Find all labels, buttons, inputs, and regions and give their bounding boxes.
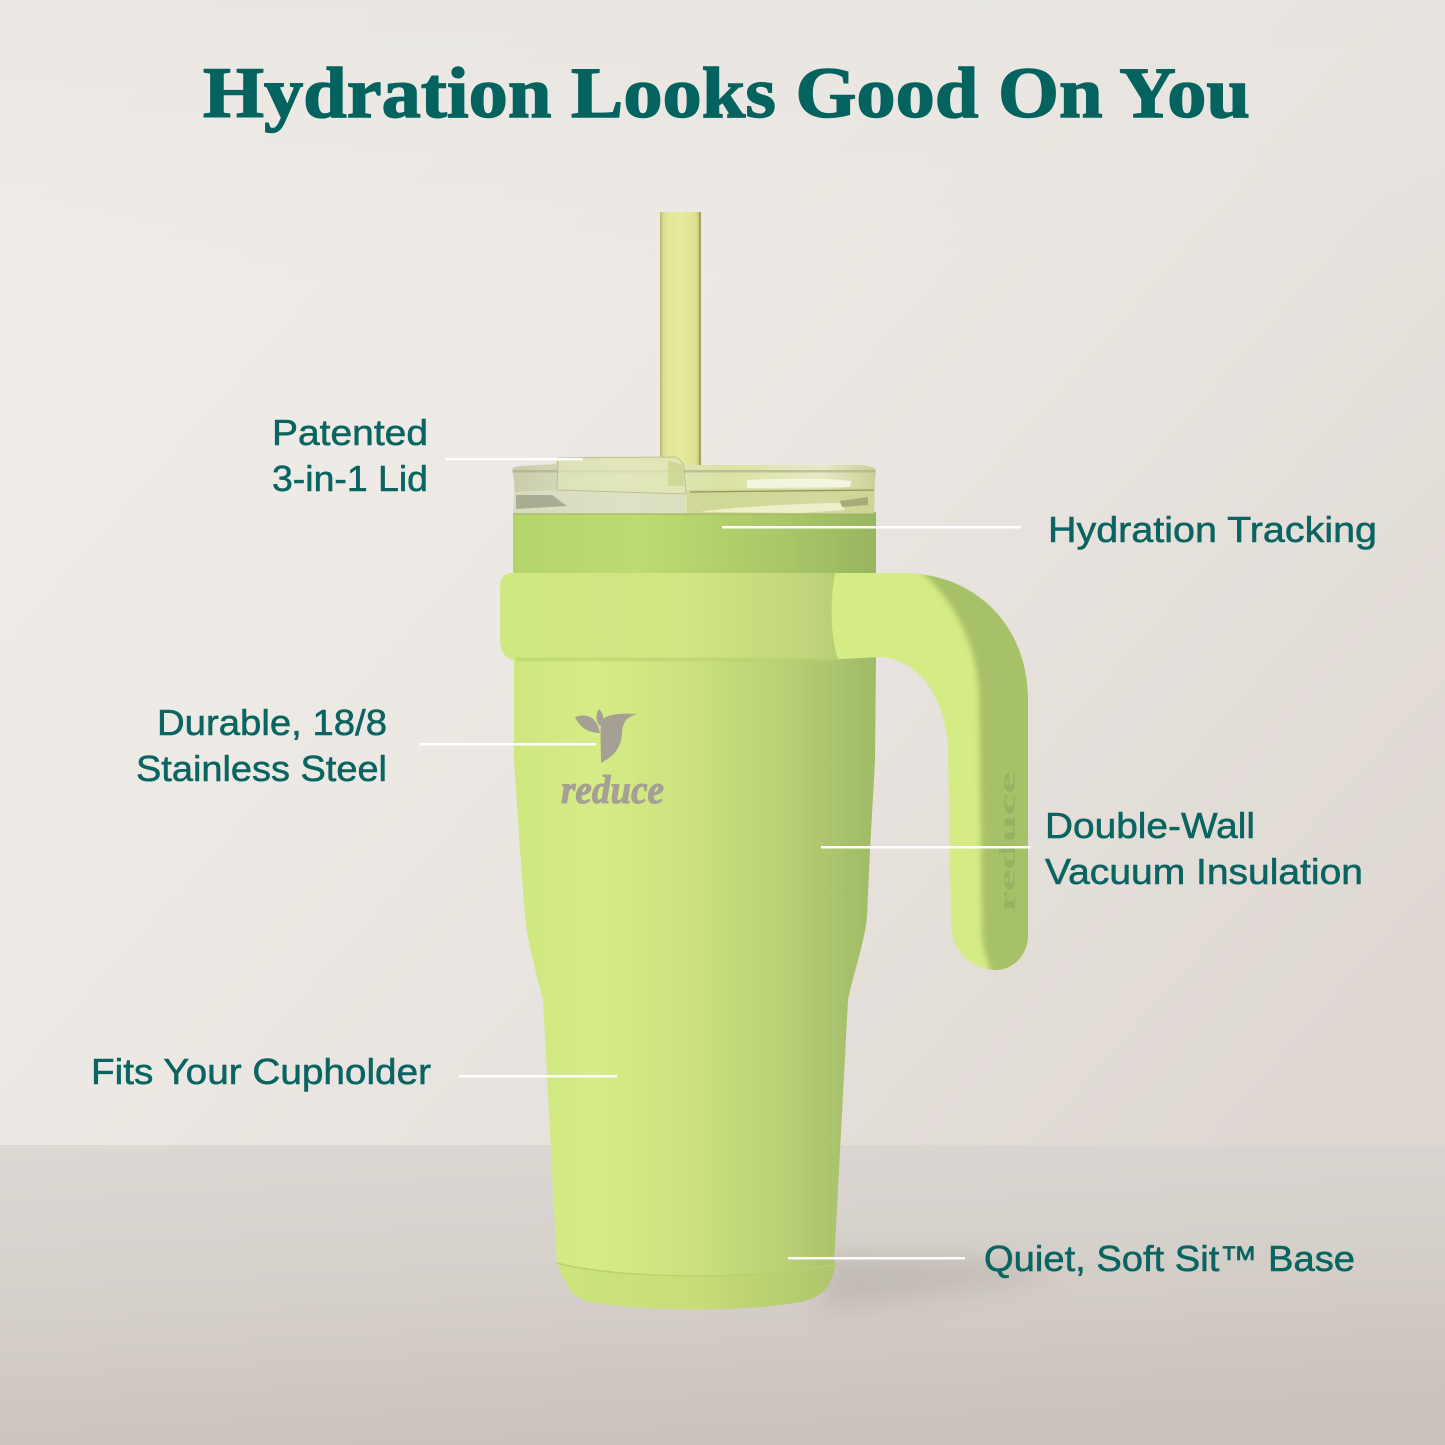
- callout: hydration tracking: Hydration Tracking: [1048, 509, 1377, 550]
- callout: soft sit base: Quiet, Soft Sit™ Base: [984, 1238, 1355, 1279]
- tumbler main body: [514, 650, 876, 1276]
- straw: [660, 212, 701, 467]
- title: Hydration Looks Good On You: [203, 53, 1250, 133]
- callout: vacuum insulation: [821, 805, 1363, 892]
- callout: vacuum insulation: Vacuum Insulation: [1045, 851, 1363, 892]
- callout: cupholder: Fits Your Cupholder: [91, 1051, 431, 1092]
- logo leaves and stem: [575, 709, 637, 763]
- callout: stainless steel: Stainless Steel: [136, 748, 387, 789]
- callout: vacuum insulation: Double-Wall: [1045, 805, 1255, 846]
- callout: stainless steel: [136, 702, 596, 789]
- handle: [832, 573, 1028, 970]
- transparent lid: [512, 456, 876, 514]
- tumbler shadow: [820, 1255, 1060, 1310]
- logo wordmark: reduce: [561, 767, 664, 812]
- callout: patented lid: Patented: [272, 412, 428, 453]
- floor surface: [0, 1145, 1445, 1445]
- handle embossed logo: reduce: [995, 772, 1020, 912]
- background wall: [0, 0, 1445, 1146]
- callout: stainless steel: Durable, 18/8: [157, 702, 387, 743]
- callout: patented lid: [272, 412, 583, 499]
- engraved reduce logo: [561, 709, 664, 812]
- callout: patented lid: 3-in-1 Lid: [272, 458, 428, 499]
- product: lime green tumbler: [500, 212, 1040, 1309]
- tumbler upper neck: [513, 512, 876, 576]
- grip band: [500, 573, 838, 661]
- base: [557, 1263, 836, 1309]
